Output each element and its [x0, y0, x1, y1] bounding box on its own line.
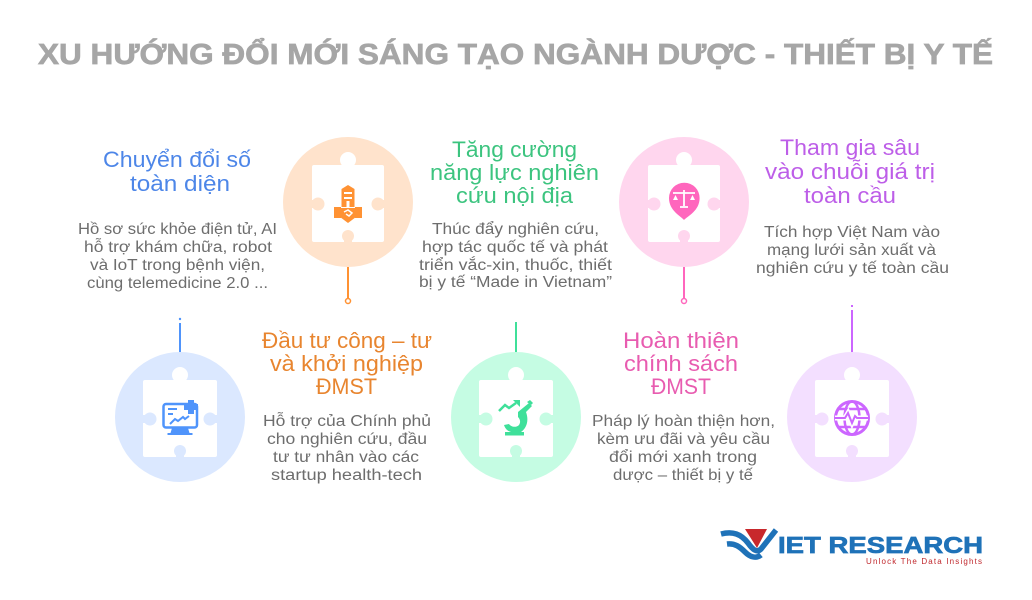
icon: globe with pulse [835, 402, 868, 434]
heading: chuỗi giá trị toàn cầu: Tham gia sâu [780, 135, 920, 160]
heading: đầu tư công tư: Đầu tư công – tư [262, 328, 432, 353]
text block: đầu tư công tư [263, 413, 431, 484]
heading: chuỗi giá trị toàn cầu [765, 135, 935, 208]
text block: năng lực nghiên cứu: bị y tế “Made in Vietnam” [419, 274, 612, 291]
text block: hoàn thiện chính sách: kèm ưu đãi và yêu cầu [597, 431, 770, 448]
heading: chuyển đổi số [103, 147, 251, 196]
text block: hoàn thiện chính sách [592, 413, 775, 484]
heading: năng lực nghiên cứu [430, 137, 599, 208]
text block: năng lực nghiên cứu [419, 221, 613, 291]
heading: năng lực nghiên cứu: năng lực nghiên [430, 160, 599, 185]
text block: năng lực nghiên cứu: Thúc đẩy nghiên cứu, [432, 221, 599, 238]
panel: năng lực nghiên cứu [419, 137, 613, 482]
text block: hoàn thiện chính sách: Pháp lý hoàn thiện hơn, [592, 413, 775, 430]
text block: đầu tư công tư: tư tư nhân vào các [273, 449, 419, 466]
logo wordmark: IET RESEARCH [778, 532, 983, 558]
heading: đầu tư công tư [262, 328, 432, 399]
puzzle circle: purple [787, 352, 917, 482]
text block: chuyển đổi số: hỗ trợ khám chữa, robot [84, 239, 273, 256]
heading: chuyển đổi số: toàn diện [130, 171, 230, 196]
text block: năng lực nghiên cứu: triển vắc-xin, thuốc, thiết [419, 257, 613, 274]
heading: chuỗi giá trị toàn cầu: vào chuỗi giá trị [765, 159, 935, 184]
text block: đầu tư công tư: Hỗ trợ của Chính phủ [263, 413, 431, 430]
text block: chuỗi giá trị toàn cầu [756, 224, 949, 277]
text block: chuyển đổi số [78, 221, 277, 292]
text block: đầu tư công tư: cho nghiên cứu, đầu [267, 431, 427, 448]
puzzle circle: green [451, 352, 581, 482]
text block: chuyển đổi số: Hồ sơ sức khỏe điện tử, AI [78, 221, 277, 238]
text block: chuỗi giá trị toàn cầu: Tích hợp Việt Nam vào [764, 224, 940, 241]
icon: handshake with rocket [334, 185, 362, 223]
icon: scales in map pin [669, 183, 700, 220]
panel: đầu tư công tư [262, 137, 432, 484]
logo tagline: Unlock The Data Insights [866, 557, 982, 566]
connector: blue [179, 318, 181, 353]
text block: hoàn thiện chính sách: đổi mới xanh trong [609, 449, 757, 466]
text block: đầu tư công tư: startup health-tech [271, 467, 422, 484]
puzzle circle: orange [283, 137, 413, 267]
heading: đầu tư công tư: ĐMST [316, 374, 377, 399]
text block: chuyển đổi số: cùng telemedicine 2.0 ... [87, 275, 268, 292]
heading: chuyển đổi số: Chuyển đổi số [103, 147, 251, 172]
heading: đầu tư công tư: và khởi nghiệp [270, 351, 423, 376]
text block: hoàn thiện chính sách: dược – thiết bị y tế [613, 467, 753, 484]
connector: orange [346, 267, 350, 304]
heading: hoàn thiện chính sách: chính sách [624, 351, 738, 376]
panel: chuỗi giá trị toàn cầu [756, 135, 949, 482]
heading: hoàn thiện chính sách: Hoàn thiện [623, 328, 739, 353]
panel: hoàn thiện chính sách [592, 137, 775, 484]
heading: năng lực nghiên cứu: cứu nội địa [456, 183, 574, 208]
panel: chuyển đổi số [78, 147, 277, 482]
logo: Viet Research [721, 529, 983, 566]
puzzle circle: pink [619, 137, 749, 267]
heading: năng lực nghiên cứu: Tăng cường [452, 137, 577, 162]
heading: hoàn thiện chính sách [623, 328, 739, 399]
text block: năng lực nghiên cứu: hợp tác quốc tế và phát [422, 239, 609, 256]
logo triangle [745, 529, 767, 548]
text block: chuyển đổi số: và IoT trong bệnh viện, [90, 257, 265, 274]
text block: chuỗi giá trị toàn cầu: mạng lưới sản xuất và [767, 242, 936, 259]
puzzle circle: blue [115, 352, 245, 482]
connector: pink [682, 267, 686, 304]
heading: hoàn thiện chính sách: ĐMST [651, 374, 711, 399]
logo mark [721, 530, 776, 557]
title: XU HƯỚNG ĐỔI MỚI SÁNG TẠO NGÀNH DƯỢC - THIẾT BỊ Y TẾ [38, 37, 993, 71]
connector: green [515, 322, 517, 353]
text block: chuỗi giá trị toàn cầu: nghiên cứu y tế toàn cầu [756, 260, 949, 277]
heading: chuỗi giá trị toàn cầu: toàn cầu [804, 183, 896, 208]
icon: microscope with trend arrow [499, 400, 533, 436]
icon: monitor with chart and plus [164, 400, 198, 435]
connector: purple [851, 305, 853, 353]
